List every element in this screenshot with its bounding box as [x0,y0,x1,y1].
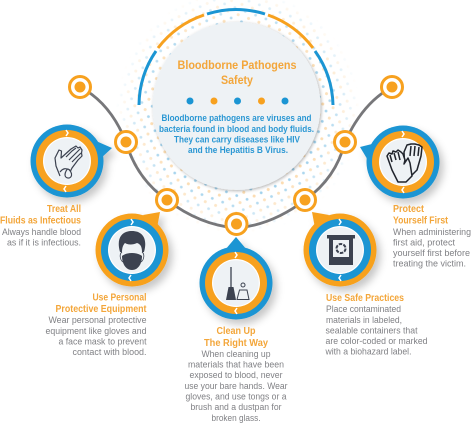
intro text: and the Hepatitis B Virus. [188,145,288,156]
text: personal protective equipment: Use Personal [92,292,147,304]
text: clean up: broken glass. [212,413,260,423]
text: clean up [184,326,288,423]
text: treat all fluids: Treat All [47,204,81,215]
intro text: bacteria found in blood and body fluids. [159,124,314,135]
connecting curved line [80,87,392,228]
text: protect yourself: Protect [393,204,425,215]
text: personal protective equipment: a face mask to prevent [58,336,147,346]
badge: clean up [200,237,272,320]
text: safe practices: materials in labeled, [326,315,402,325]
text: clean up: materials that have been [188,360,284,370]
text: clean up: exposed to blood, never [190,370,282,380]
title: Safety [221,75,254,87]
segmented outer arcs [139,10,333,105]
badge: treat all fluids [30,124,112,198]
text: treat all fluids [0,204,81,248]
text: protect yourself: When administering [393,227,471,237]
node 5 [294,190,316,210]
text: personal protective equipment [46,292,147,357]
text: safe practices: are color-coded or marked [326,336,428,346]
text: safe practices: Place contaminated [326,304,401,314]
central circle [152,22,320,190]
text: safe practices: sealable containers that [326,326,418,336]
intro text [159,113,314,156]
icon: biohazard bin [327,235,355,265]
text: personal protective equipment: Protective Equipment [56,304,147,315]
text: clean up: gloves, and use tongs or a [186,392,286,402]
icon: hand with drop [55,146,82,178]
text: protect yourself [393,204,471,268]
node 1 [70,76,90,98]
text: clean up: When cleaning up [202,349,270,359]
text: personal protective equipment: equipment like gloves and [46,326,146,336]
title [178,60,296,87]
badge: safe practices [304,212,376,286]
text: protect yourself: treating the victim. [393,258,466,268]
text: personal protective equipment: Wear personal protective [48,315,146,325]
node 3 [156,190,178,210]
text: clean up: The Right Way [204,338,268,349]
text: safe practices [325,293,428,356]
dot row [186,98,288,104]
icon: gloves [387,144,422,182]
text: treat all fluids: Fluids as Infectious [0,216,81,226]
icon: broom and dustpan [226,267,249,300]
icon: face mask [119,231,145,270]
node 2 [116,132,136,152]
text: clean up: use your bare hands. Wear [184,381,288,391]
text: clean up: brush and a dustpan for [190,402,282,412]
text: protect yourself: Yourself First [393,216,449,226]
node 7 [382,76,402,98]
badge: personal protective equipment [96,212,168,286]
intro text: They can carry diseases like HIV [174,134,301,146]
text: protect yourself: first aid, protect [393,238,455,248]
title: Bloodborne Pathogens [178,60,296,72]
text: protect yourself: yourself first before [393,248,470,258]
node 4 [226,214,247,234]
text: clean up: Clean Up [216,326,256,337]
text: safe practices: Use Safe Practices [326,293,404,304]
text: treat all fluids: as if it is infectious. [7,238,81,248]
halftone dots [120,0,356,228]
badge: protect yourself [360,126,440,198]
text: safe practices: with a biohazard label. [325,346,412,356]
text: personal protective equipment: contact with blood. [72,347,146,357]
text: treat all fluids: Always handle blood [2,227,81,237]
node 6 [334,132,356,152]
intro text: Bloodborne pathogens are viruses and [162,113,312,124]
